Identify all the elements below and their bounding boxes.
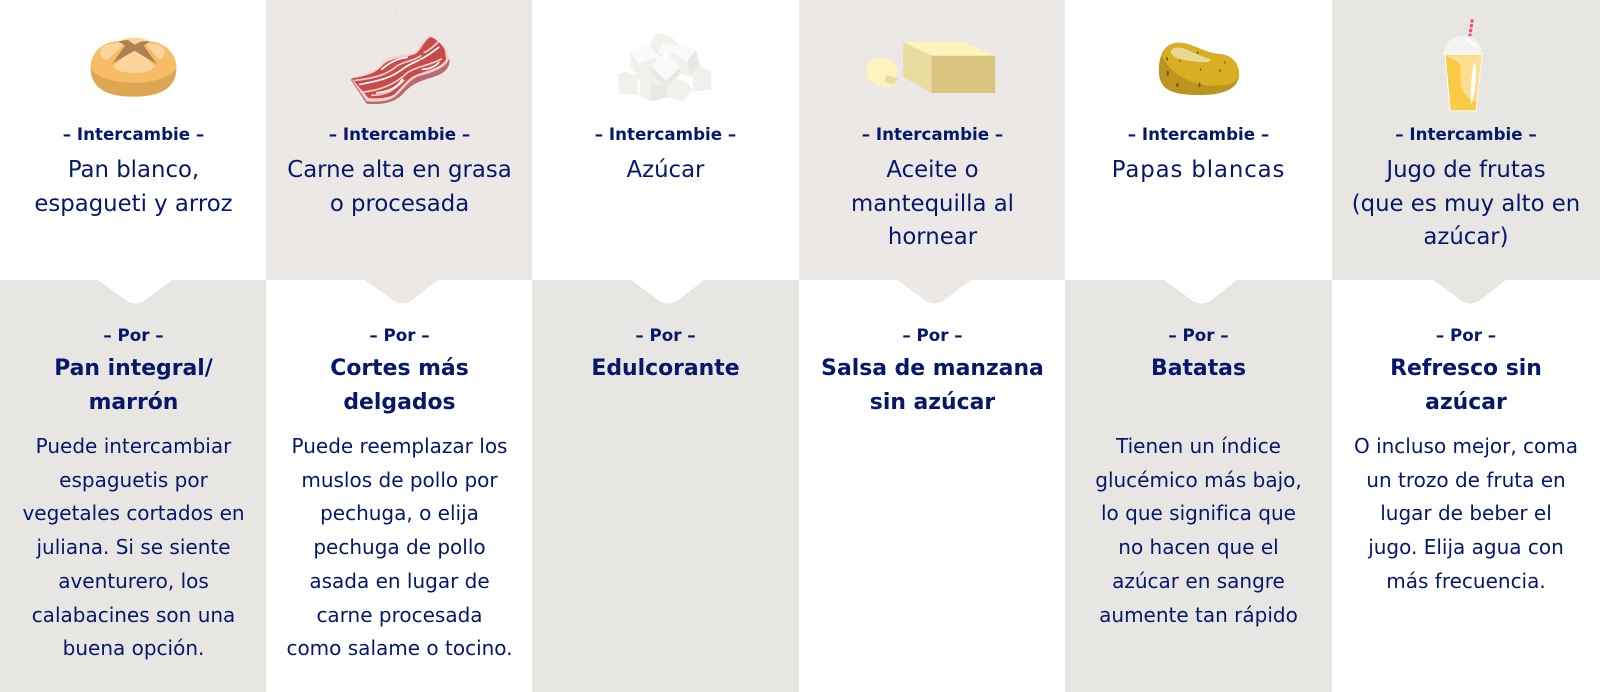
replacement heading: Cortes más <box>330 356 469 381</box>
replacement heading: Salsa de manzana <box>821 356 1044 381</box>
notch <box>365 280 438 304</box>
explanation: asada en lugar de <box>309 569 490 593</box>
column 3: sugar <box>532 0 799 692</box>
food to swap: espagueti y arroz <box>34 191 233 217</box>
explanation: lo que significa que <box>1101 501 1296 525</box>
explanation: muslos de pollo por <box>301 468 498 492</box>
explanation <box>286 434 513 660</box>
label: por: – Por – <box>1436 325 1496 345</box>
notch <box>631 280 704 304</box>
food to swap <box>1352 157 1580 250</box>
explanation: juliana. Si se siente <box>36 535 231 559</box>
food to swap <box>851 157 1014 250</box>
replacement heading <box>330 356 469 415</box>
explanation: pechuga, o elija <box>320 501 479 525</box>
icon: butter <box>866 42 996 93</box>
explanation: espaguetis por <box>59 468 208 492</box>
explanation: no hacen que el <box>1118 535 1279 559</box>
replacement heading: azúcar <box>1425 390 1507 415</box>
label: por: – Por – <box>902 325 963 345</box>
explanation: lugar de beber el <box>1380 501 1552 525</box>
label: intercambie: – Intercambie – <box>1128 124 1269 144</box>
food to swap: Pan blanco, <box>68 157 199 183</box>
explanation: glucémico más bajo, <box>1095 468 1302 492</box>
replacement heading <box>1390 356 1542 415</box>
explanation: O incluso mejor, coma <box>1354 434 1578 458</box>
icon: potato <box>1158 42 1240 95</box>
column 4: butter <box>799 0 1065 415</box>
bottom panel: salsa de manzana <box>799 280 1066 692</box>
food to swap: Carne alta en grasa <box>287 157 512 183</box>
explanation: más frecuencia. <box>1386 569 1546 593</box>
explanation: como salame o tocino. <box>286 636 513 660</box>
explanation <box>22 434 245 660</box>
label: por: – Por – <box>1168 325 1229 345</box>
food to swap: hornear <box>888 224 977 250</box>
top panel: juice <box>1332 0 1600 280</box>
label: intercambie: – Intercambie – <box>862 124 1003 144</box>
replacement heading: Edulcorante <box>591 356 740 381</box>
notch <box>1433 280 1506 304</box>
explanation: jugo. Elija agua con <box>1368 535 1564 559</box>
top panel: butter <box>799 0 1066 280</box>
replacement heading <box>54 356 213 415</box>
bottom panel: refresco sin azucar <box>1332 280 1600 692</box>
replacement heading: Refresco sin <box>1390 356 1542 381</box>
top panel: potato <box>1065 0 1332 280</box>
label: por: – Por – <box>635 325 696 345</box>
explanation: azúcar en sangre <box>1112 569 1285 593</box>
bottom panel: batatas <box>1065 280 1332 692</box>
replacement heading: Batatas <box>1151 356 1246 381</box>
icon: juice cup <box>1442 19 1484 112</box>
explanation: calabacines son una <box>32 603 235 627</box>
icon: bacon <box>350 5 450 104</box>
label: por: – Por – <box>369 325 430 345</box>
label: intercambie: – Intercambie – <box>595 124 736 144</box>
food to swap: o procesada <box>330 191 469 217</box>
food to swap: mantequilla al <box>851 191 1014 217</box>
column 6: juice <box>1332 0 1600 593</box>
label: intercambie: – Intercambie – <box>1395 124 1537 144</box>
bottom panel: edulcorante <box>532 280 799 692</box>
food to swap: Aceite o <box>886 157 979 183</box>
food to swap: azúcar) <box>1423 224 1509 250</box>
icon: bread <box>90 38 176 97</box>
explanation: carne procesada <box>316 603 483 627</box>
label: intercambie: – Intercambie – <box>329 124 470 144</box>
label: intercambie: – Intercambie – <box>63 124 204 144</box>
column 1: bread <box>0 38 266 692</box>
explanation <box>1354 434 1578 593</box>
label: por: – Por – <box>103 325 164 345</box>
replacement heading: marrón <box>89 390 178 415</box>
replacement heading: delgados <box>343 390 456 415</box>
food to swap: (que es muy alto en <box>1352 191 1580 217</box>
replacement heading <box>821 356 1044 415</box>
food to swap <box>287 157 512 217</box>
icon: sugar cubes <box>618 33 712 102</box>
explanation: aventurero, los <box>58 569 209 593</box>
notch <box>98 280 172 304</box>
food to swap <box>34 157 233 217</box>
column 2: bacon <box>266 0 532 692</box>
explanation: un trozo de fruta en <box>1366 468 1566 492</box>
column 5: potato <box>1065 0 1332 692</box>
explanation: pechuga de pollo <box>313 535 486 559</box>
bottom panel: cortes <box>266 280 533 692</box>
explanation: vegetales cortados en <box>22 501 245 525</box>
food to swap: Papas blancas <box>1112 157 1285 183</box>
bottom panel: pan integral <box>0 280 267 692</box>
replacement heading: Pan integral/ <box>54 356 213 381</box>
food to swap: Jugo de frutas <box>1386 157 1546 183</box>
top panel: bread <box>0 0 267 280</box>
notch <box>1164 280 1237 304</box>
explanation: aumente tan rápido <box>1099 603 1298 627</box>
replacement heading: sin azúcar <box>870 390 995 415</box>
top panel: sugar <box>532 0 799 280</box>
food to swap: Azúcar <box>627 157 704 183</box>
explanation <box>1095 434 1302 627</box>
explanation: Puede intercambiar <box>36 434 231 458</box>
explanation: buena opción. <box>63 636 204 660</box>
explanation: Puede reemplazar los <box>292 434 507 458</box>
explanation: Tienen un índice <box>1116 434 1281 458</box>
top panel: bacon <box>266 0 533 280</box>
notch <box>897 280 971 304</box>
